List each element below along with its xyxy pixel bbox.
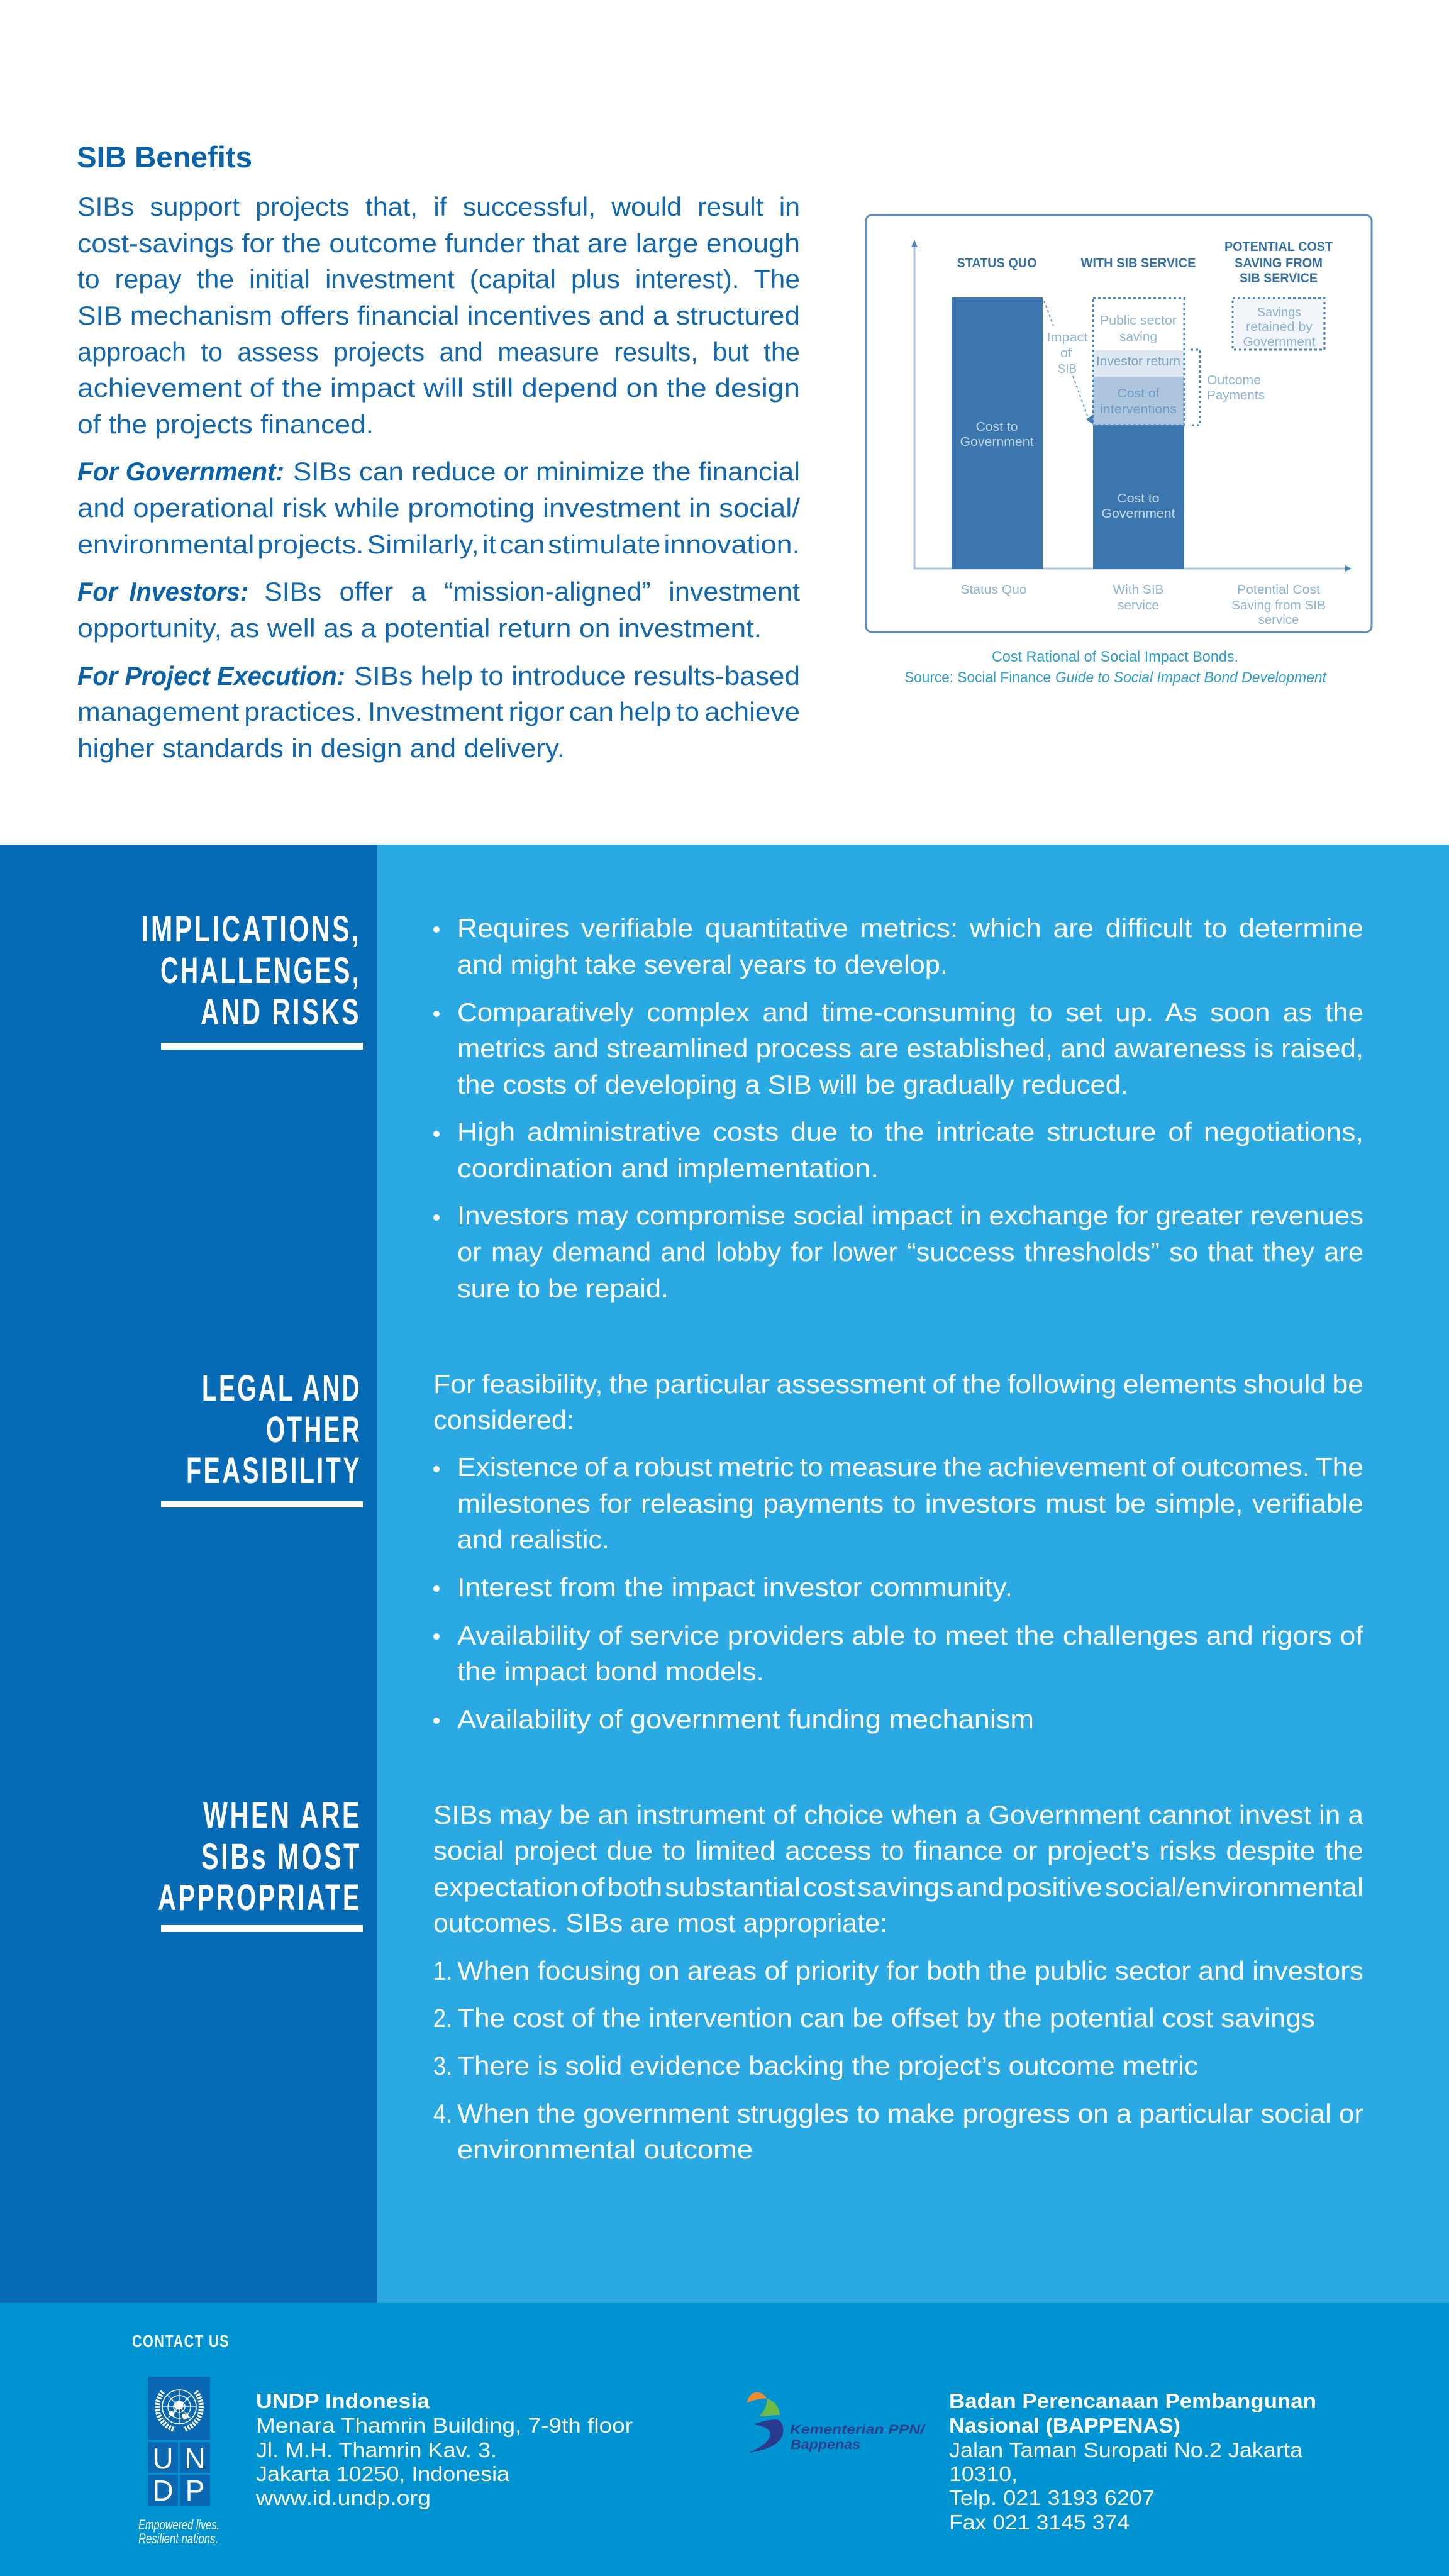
arrow: impact of SIB: SIB bbox=[1058, 362, 1077, 376]
text block: implications list bbox=[433, 913, 1363, 1303]
text block: when appropriate bbox=[433, 1800, 1364, 2164]
icon: Bappenas logo: Bappenas bbox=[791, 2438, 860, 2452]
heading: legal and other feasibility: FEASIBILITY bbox=[186, 1450, 362, 1491]
text block: for investors: opportunity, as well as a potential return on investment. bbox=[77, 613, 762, 643]
bullet: complex to set up: metrics and streamlined process are established, and awareness is raised, bbox=[457, 1033, 1363, 1063]
bullet: investors compromise: sure to be repaid. bbox=[457, 1274, 669, 1303]
numbered item 3: There is solid evidence backing the project’s outcome metric bbox=[457, 2051, 1198, 2080]
bar: with SIB service: Investor return bbox=[1096, 355, 1180, 369]
column headings: SIB SERVICE bbox=[1240, 271, 1318, 286]
tagline: Empowered lives. bbox=[138, 2517, 219, 2533]
x axis labels: Status Quo bbox=[961, 583, 1026, 597]
icon: UNDP logo: U bbox=[152, 2442, 174, 2475]
icon: UN emblem bbox=[157, 2390, 201, 2429]
text block: Bappenas address bbox=[949, 2389, 1316, 2534]
text block: SIB overview: of the projects financed. bbox=[77, 409, 374, 439]
text block: Bappenas address: 10310, bbox=[949, 2462, 1018, 2485]
text block: for government: environmental projects. Similarly, it can stimulate innovation. bbox=[77, 530, 800, 559]
numbered item 1: When focusing on areas of priority for both the public sector and investors bbox=[457, 1956, 1363, 1985]
bullet: verifiable metrics bbox=[433, 913, 1363, 979]
text block: for government: For Government: bbox=[77, 457, 284, 486]
chart caption: Cost Rational of Social Impact Bonds. bbox=[992, 648, 1238, 665]
bracket: outcome payments: Outcome bbox=[1207, 374, 1261, 387]
column headings bbox=[957, 240, 1333, 286]
text block: for government bbox=[77, 457, 800, 559]
heading: legal and other feasibility bbox=[161, 1368, 363, 1507]
text block: when appropriate: expectation of both substantial cost savings and positive social/environmental bbox=[433, 1872, 1363, 1902]
bar: with SIB service: Government bbox=[1102, 507, 1175, 521]
bullet: investors compromise bbox=[433, 1201, 1363, 1303]
bar: with SIB service: Public sector bbox=[1100, 314, 1177, 328]
numbered item 4: When the government struggles to make progress on a particular social or bbox=[457, 2099, 1363, 2128]
icon: UNDP logo: P bbox=[186, 2474, 204, 2507]
heading: when are SIBs most appropriate: SIBs MOST bbox=[201, 1836, 362, 1877]
heading: when are SIBs most appropriate: WHEN ARE bbox=[203, 1795, 362, 1836]
bullet: investors compromise: or may demand and lobby for lower “success thresholds” so that they are bbox=[457, 1237, 1363, 1267]
text block: for investors bbox=[77, 577, 800, 643]
heading: implications, challenges, and risks: IMPLICATIONS, bbox=[142, 909, 361, 950]
bar: status quo: Cost to bbox=[976, 420, 1018, 434]
bullet: administrative costs: High administrative costs due to the intricate structure of negotiations, bbox=[457, 1117, 1363, 1146]
callout: savings retained by government: retained by bbox=[1246, 320, 1313, 334]
text block: UNDP address: Menara Thamrin Building, 7-9th floor bbox=[256, 2414, 633, 2437]
heading: implications, challenges, and risks bbox=[142, 909, 363, 1050]
text block: UNDP address: www.id.undp.org bbox=[255, 2486, 431, 2509]
text block: SIB overview: approach to assess projects and measure results, but the bbox=[77, 337, 800, 367]
bar: with SIB service: Cost to bbox=[1117, 492, 1160, 506]
bullet: complex to set up bbox=[433, 997, 1363, 1099]
heading: legal and other feasibility: LEGAL AND bbox=[202, 1368, 362, 1409]
numbered item 4: 4. bbox=[433, 2099, 452, 2128]
numbered item 2: 2. bbox=[433, 2003, 452, 2033]
text block: Bappenas address: Telp. 021 3193 6207 bbox=[949, 2486, 1155, 2509]
bar: with SIB service: interventions bbox=[1100, 402, 1177, 416]
column headings: WITH SIB SERVICE bbox=[1080, 256, 1196, 270]
heading: contact us: CONTACT US bbox=[132, 2331, 230, 2351]
chart axes bbox=[911, 240, 1352, 572]
icon: UNDP logo bbox=[138, 2377, 219, 2546]
icon: Bappenas logo: Kementerian PPN/ bbox=[790, 2423, 926, 2437]
text block: SIB overview: cost-savings for the outcome funder that are large enough bbox=[77, 228, 800, 258]
numbered item 4: environmental outcome bbox=[457, 2135, 753, 2164]
x axis labels: Potential Cost bbox=[1237, 583, 1320, 597]
arrow: impact of SIB bbox=[1044, 301, 1093, 425]
text block: UNDP address: Jl. M.H. Thamrin Kav. 3. bbox=[256, 2438, 497, 2462]
heading: SIB Benefits: SIB Benefits bbox=[77, 140, 252, 174]
text block: feasibility: For feasibility, the particular assessment of the following elements should be bbox=[433, 1369, 1363, 1399]
callout: savings retained by government bbox=[1233, 298, 1324, 350]
text block: for investors: For Investors: bbox=[77, 577, 248, 606]
panel: blue section background right bbox=[377, 845, 1449, 2303]
x axis labels: service bbox=[1118, 599, 1159, 613]
bullet: robust metric: and realistic. bbox=[457, 1524, 609, 1554]
x axis labels: service bbox=[1258, 613, 1299, 627]
heading: legal and other feasibility: OTHER bbox=[266, 1409, 362, 1450]
x axis labels: With SIB bbox=[1113, 583, 1163, 597]
text block: for project execution: higher standards in design and delivery. bbox=[77, 733, 565, 763]
bar: with SIB service: saving bbox=[1119, 330, 1157, 344]
bullet: verifiable metrics: and might take several years to develop. bbox=[457, 950, 948, 979]
bullet: service providers: Availability of service providers able to meet the challenges and rigors of bbox=[457, 1621, 1363, 1650]
bullet: government funding: Availability of government funding mechanism bbox=[457, 1704, 1034, 1734]
icon: UNDP logo: N bbox=[184, 2442, 206, 2475]
text block: feasibility: considered: bbox=[433, 1405, 574, 1435]
bullet: administrative costs bbox=[433, 1117, 1363, 1183]
numbered item 4 bbox=[433, 2099, 1363, 2164]
numbered item 3: 3. bbox=[433, 2051, 452, 2080]
bullet: robust metric: Existence of a robust metric to measure the achievement of outcomes. The bbox=[457, 1452, 1363, 1482]
bullet: robust metric bbox=[433, 1452, 1363, 1554]
chart caption: Source: Social Finance bbox=[904, 669, 1051, 686]
text block: for government: and operational risk while promoting investment in social/ bbox=[77, 493, 800, 523]
panel: footer bbox=[0, 2303, 1449, 2576]
text block: UNDP address bbox=[255, 2389, 633, 2509]
bar: with SIB service bbox=[1093, 298, 1184, 569]
heading: when are SIBs most appropriate: APPROPRIATE bbox=[158, 1877, 362, 1918]
x axis labels: Saving from SIB bbox=[1231, 599, 1326, 613]
panel: SIB benefits text bbox=[77, 140, 800, 763]
text block: for project execution bbox=[77, 661, 800, 763]
bracket: outcome payments bbox=[1191, 350, 1265, 425]
bar: status quo: Government bbox=[960, 435, 1034, 449]
text block: SIB overview: to repay the initial investment (capital plus interest). The bbox=[77, 264, 800, 294]
bullet: administrative costs: coordination and implementation. bbox=[457, 1153, 879, 1183]
callout: savings retained by government: Government bbox=[1243, 335, 1316, 349]
chart caption bbox=[904, 648, 1327, 686]
callout: savings retained by government: Savings bbox=[1257, 306, 1301, 319]
bracket: outcome payments: Payments bbox=[1207, 389, 1265, 402]
text block: SIB overview bbox=[77, 192, 800, 439]
bar: status quo bbox=[952, 297, 1043, 569]
text block: feasibility bbox=[433, 1369, 1363, 1734]
tagline bbox=[138, 2517, 219, 2546]
chart: cost rationale of social impact bonds bbox=[866, 215, 1372, 632]
heading: implications, challenges, and risks: CHALLENGES, bbox=[160, 950, 361, 991]
bullet: complex to set up: the costs of developing a SIB will be gradually reduced. bbox=[457, 1070, 1128, 1099]
heading: implications, challenges, and risks: AND RISKS bbox=[201, 992, 361, 1033]
text block: SIB overview: achievement of the impact will still depend on the design bbox=[77, 373, 800, 402]
text block: UNDP address: UNDP Indonesia bbox=[256, 2389, 430, 2412]
text block: Bappenas address: Badan Perencanaan Pembangunan bbox=[949, 2389, 1316, 2412]
numbered item 2: The cost of the intervention can be offset by the potential cost savings bbox=[457, 2003, 1315, 2033]
bullet: service providers bbox=[433, 1621, 1363, 1686]
text block: when appropriate: social project due to limited access to finance or project’s risks despite the bbox=[433, 1836, 1363, 1865]
column headings: POTENTIAL COST bbox=[1224, 240, 1333, 254]
text block: UNDP address: Jakarta 10250, Indonesia bbox=[256, 2462, 510, 2485]
bullet: complex to set up: Comparatively complex and time-consuming to set up. As soon as the bbox=[457, 997, 1363, 1027]
column headings: SAVING FROM bbox=[1235, 256, 1323, 270]
tagline: Resilient nations. bbox=[138, 2531, 218, 2546]
arrow: impact of SIB: of bbox=[1060, 347, 1072, 360]
bullet: service providers: the impact bond models. bbox=[457, 1657, 764, 1686]
bullet: investors compromise: Investors may compromise social impact in exchange for greater revenues bbox=[457, 1201, 1363, 1230]
icon: Bappenas logo bbox=[747, 2392, 926, 2453]
text block: SIB overview: SIBs support projects that, if successful, would result in bbox=[77, 192, 800, 221]
text block: Bappenas address: Fax 021 3145 374 bbox=[949, 2511, 1130, 2534]
numbered item 1: 1. bbox=[433, 1956, 452, 1985]
bullet: investor interest: Interest from the impact investor community. bbox=[457, 1572, 1013, 1602]
text block: for government: SIBs can reduce or minimize the financial bbox=[293, 457, 800, 486]
heading: when are SIBs most appropriate bbox=[158, 1795, 363, 1932]
bullet: verifiable metrics: Requires verifiable quantitative metrics: which are difficult to determine bbox=[457, 913, 1363, 943]
icon: UNDP logo: D bbox=[152, 2474, 174, 2507]
arrow: impact of SIB: Impact bbox=[1046, 331, 1088, 345]
text block: when appropriate: SIBs may be an instrument of choice when a Government cannot invest in a bbox=[433, 1800, 1364, 1829]
chart caption: Guide to Social Impact Bond Development bbox=[1055, 669, 1327, 686]
text block: for project execution: For Project Execution: bbox=[77, 661, 345, 691]
text block: for project execution: SIBs help to introduce results-based bbox=[354, 661, 800, 691]
text block: Bappenas address: Nasional (BAPPENAS) bbox=[949, 2414, 1180, 2437]
text block: Bappenas address: Jalan Taman Suropati No.2 Jakarta bbox=[949, 2438, 1303, 2462]
text block: SIB overview: SIB mechanism offers financial incentives and a structured bbox=[77, 301, 800, 330]
text block: for investors: SIBs offer a “mission-aligned” investment bbox=[264, 577, 800, 606]
text block: for project execution: management practices. Investment rigor can help to achieve bbox=[77, 697, 800, 726]
column headings: STATUS QUO bbox=[957, 256, 1036, 270]
bar: with SIB service: Cost of bbox=[1117, 387, 1160, 401]
bullet: robust metric: milestones for releasing payments to investors must be simple, verifiable bbox=[457, 1489, 1363, 1518]
x axis labels bbox=[961, 583, 1326, 627]
text block: when appropriate: outcomes. SIBs are most appropriate: bbox=[433, 1908, 887, 1938]
panel: blue section background left bbox=[0, 845, 377, 2303]
